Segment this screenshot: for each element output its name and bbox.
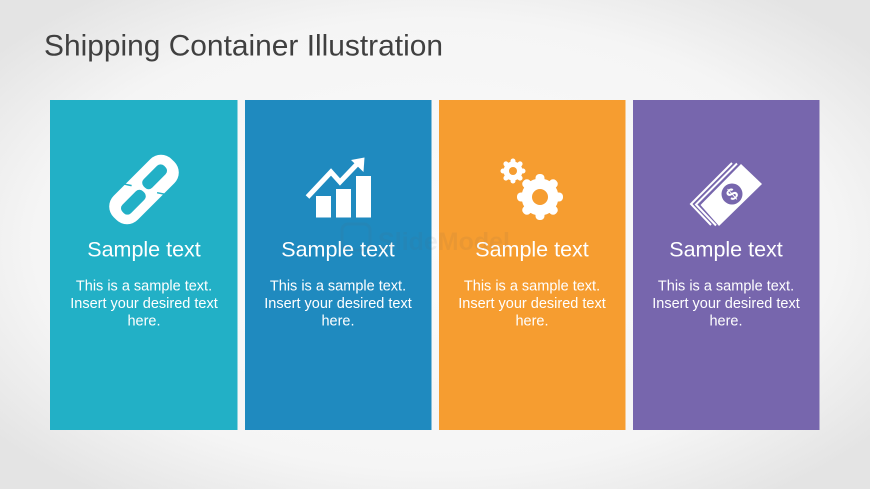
- title: Shipping Container Illustration: [44, 30, 443, 62]
- heading: card 1: Sample text: [87, 238, 201, 262]
- text block: card 3: This is a sample text.: [464, 278, 600, 294]
- icon: gears: [500, 158, 563, 220]
- text block: card 2: Insert your desired text: [264, 296, 412, 312]
- text block: card 4: This is a sample text.: [658, 278, 794, 294]
- watermark: [342, 224, 510, 256]
- icon: rising bar chart: [308, 158, 371, 218]
- text block: card 3: Insert your desired text: [458, 296, 606, 312]
- icon: chain link: [103, 148, 185, 231]
- text block: card 2: This is a sample text.: [270, 278, 406, 294]
- text block: card 1: Insert your desired text: [70, 296, 218, 312]
- icon: banknotes: [691, 163, 762, 226]
- text block: card 4: Insert your desired text: [652, 296, 800, 312]
- panel: orange gears card: [439, 100, 626, 430]
- text block: card 2: here.: [321, 314, 355, 330]
- heading: card 2: Sample text: [281, 238, 395, 262]
- panel: purple money card: [633, 100, 820, 430]
- text block: card 3: here.: [515, 314, 549, 330]
- watermark: SlideModel: [378, 228, 510, 256]
- text block: card 1: This is a sample text.: [76, 278, 212, 294]
- heading: card 3: Sample text: [475, 238, 589, 262]
- panel: blue chart card: [245, 100, 432, 430]
- text block: card 1: here.: [127, 314, 161, 330]
- text block: card 4: here.: [709, 314, 743, 330]
- heading: card 4: Sample text: [669, 238, 783, 262]
- icon: banknotes: $: [722, 184, 743, 205]
- panel: teal link card: [50, 100, 238, 430]
